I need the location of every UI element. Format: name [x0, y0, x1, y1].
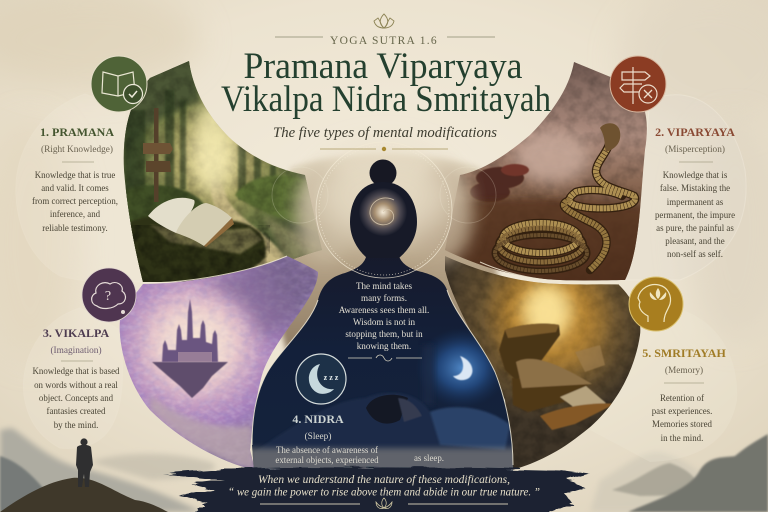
- cloud texture light: [120, 256, 318, 446]
- bottom mist: [245, 448, 525, 474]
- subtitle divider: [320, 147, 448, 151]
- text: nidra: 4. NIDRA: [292, 412, 344, 426]
- text: nidra: as sleep.: [414, 453, 444, 463]
- treasure chest: [499, 324, 615, 430]
- panel: nidra body: [252, 257, 514, 471]
- text: vikalpa: object. Concepts and: [39, 393, 114, 403]
- open book: [148, 198, 234, 247]
- sleeper face: [398, 398, 422, 422]
- quote band: [162, 467, 590, 512]
- central light: [147, 301, 243, 389]
- title: [221, 46, 551, 120]
- forest path: [212, 188, 286, 268]
- text: nidra: The absence of awareness of: [276, 445, 378, 455]
- icon: nidra moon: [296, 354, 346, 404]
- rope snake shadow: [495, 135, 635, 271]
- text: pramana: reliable testimony.: [42, 223, 108, 233]
- rock foreground: [0, 478, 168, 512]
- red shrub: [470, 164, 529, 202]
- forest trees: [125, 90, 276, 250]
- rock moss texture: [130, 225, 270, 285]
- floating castle: [152, 299, 228, 398]
- mandala rings: [272, 142, 496, 278]
- text: smritayah: past experiences.: [652, 406, 712, 416]
- lower cloud fade: [150, 395, 255, 470]
- forest canopy: [124, 61, 202, 146]
- text: smritayah: Retention of: [660, 393, 704, 403]
- galaxy spiral: [359, 188, 407, 236]
- eyebrow: yoga sutra 1.6: YOGA SUTRA 1.6: [330, 35, 438, 47]
- text: vikalpa: Knowledge that is based: [32, 366, 120, 376]
- center text: [339, 281, 429, 361]
- smritayah texture: [448, 264, 640, 470]
- text: smritayah: [642, 346, 726, 443]
- cloud texture dark: [120, 258, 318, 467]
- quote text: “ we gain the power to rise above them and abide in our true nature. ”: [228, 484, 540, 498]
- forest light rays: [193, 102, 233, 194]
- upper right purple shade: [200, 256, 320, 340]
- viparyaya texture: [460, 62, 647, 203]
- text: vikalpa: [32, 326, 120, 430]
- centre tan backdrop: [270, 154, 500, 400]
- text: pramana: and valid. It comes: [41, 183, 109, 193]
- text: pramana: Knowledge that is true: [35, 170, 115, 180]
- text: vikalpa: on words without a real: [34, 380, 118, 390]
- oval panel: pramana: [16, 94, 143, 282]
- center text: many forms.: [361, 293, 407, 303]
- icon: smritayah head with lotus: [629, 277, 683, 331]
- text: viparyaya: non-self as self.: [667, 249, 723, 259]
- text: viparyaya: 2. VIPARYAYA: [655, 125, 735, 139]
- icon: pramana book: [91, 56, 147, 112]
- icon: viparyaya signpost: [610, 56, 666, 112]
- oval panel: vikalpa: [23, 308, 122, 448]
- text: smritayah: Memories stored: [652, 419, 713, 429]
- text: pramana: [32, 125, 118, 233]
- title: Vikalpa Nidra Smritayah: [221, 79, 551, 120]
- icon: vikalpa thought cloud: [82, 268, 136, 322]
- curtains: [428, 355, 436, 382]
- mountains right: [590, 434, 768, 512]
- misty patch: [514, 132, 590, 184]
- window with moonlight: [428, 332, 498, 403]
- subtitle: The five types of mental modifications: [273, 125, 497, 141]
- icon: vikalpa thought cloud: ?: [105, 289, 111, 304]
- text: nidra: (Sleep): [305, 431, 331, 442]
- text: viparyaya: [655, 125, 735, 259]
- text: vikalpa: fantasies created: [47, 406, 106, 416]
- text: pramana: (Right Knowledge): [41, 144, 113, 155]
- text: vikalpa: 3. VIKALPA: [43, 326, 109, 340]
- text: pramana: 1. PRAMANA: [40, 125, 114, 139]
- smritayah glow: [523, 284, 571, 340]
- rock: [129, 215, 266, 284]
- centre soft fade: [295, 149, 473, 263]
- header lotus icon: [374, 14, 394, 28]
- quote divider with lotus: [260, 498, 508, 509]
- silhouette head with galaxy: [350, 160, 417, 258]
- text: nidra: external objects, experienced: [275, 455, 379, 465]
- center text: stopping them, but in: [345, 329, 423, 339]
- sleeper hair: [366, 395, 408, 424]
- text: smritayah: (Memory): [665, 365, 703, 376]
- title: Pramana Viparyaya: [244, 46, 522, 87]
- text: vikalpa: (Imagination): [50, 345, 102, 356]
- quote text: When we understand the nature of these modifications,: [258, 472, 510, 486]
- panel: viparyaya scene: [445, 62, 647, 280]
- text: viparyaya: as pure, the painful as: [656, 223, 734, 233]
- text: viparyaya: impermanent as: [667, 197, 724, 207]
- panel: forest scene: [124, 61, 322, 282]
- text: pramana: from correct perception,: [32, 196, 118, 206]
- text: nidra: [275, 412, 444, 465]
- text: viparyaya: permanent, the impure: [655, 210, 735, 220]
- crescent moon: [453, 356, 472, 380]
- panel: smritayah scene: [445, 256, 640, 470]
- quote text: [228, 472, 540, 498]
- center text: The mind takes: [356, 281, 412, 291]
- text: viparyaya: false. Mistaking the: [660, 183, 730, 193]
- text: pramana: inference, and: [50, 209, 101, 219]
- rope snake: [495, 135, 635, 271]
- mountains left: [0, 428, 215, 512]
- center text: knowing them.: [357, 341, 411, 351]
- icon: nidra moon: z z z: [324, 373, 339, 382]
- forest painterly texture: [124, 62, 306, 266]
- forest undergrowth: [120, 185, 205, 285]
- signpost: [143, 108, 173, 202]
- panel outlines: [143, 256, 618, 465]
- text: vikalpa: by the mind.: [54, 420, 98, 430]
- center text: Wisdom is not in: [353, 317, 415, 327]
- text: smritayah: 5. SMRITAYAH: [642, 346, 726, 360]
- text: viparyaya: pleasant, and the: [665, 236, 725, 246]
- smritayah wide glow: [505, 280, 605, 380]
- center text: Awareness sees them all.: [339, 305, 429, 315]
- paper shading: [0, 0, 768, 360]
- text: viparyaya: (Misperception): [665, 144, 725, 155]
- text: viparyaya: Knowledge that is: [663, 170, 728, 180]
- ground: [453, 196, 640, 280]
- panel: vikalpa scene: [120, 256, 318, 468]
- oval panel: smritayah: [590, 305, 737, 462]
- oval panel: viparyaya: [625, 95, 746, 280]
- text: smritayah: in the mind.: [661, 433, 703, 443]
- snake hood: [600, 123, 620, 152]
- standing figure: [76, 438, 93, 487]
- sleeping person and blankets: [253, 393, 512, 462]
- forest lower right shade: [264, 216, 322, 259]
